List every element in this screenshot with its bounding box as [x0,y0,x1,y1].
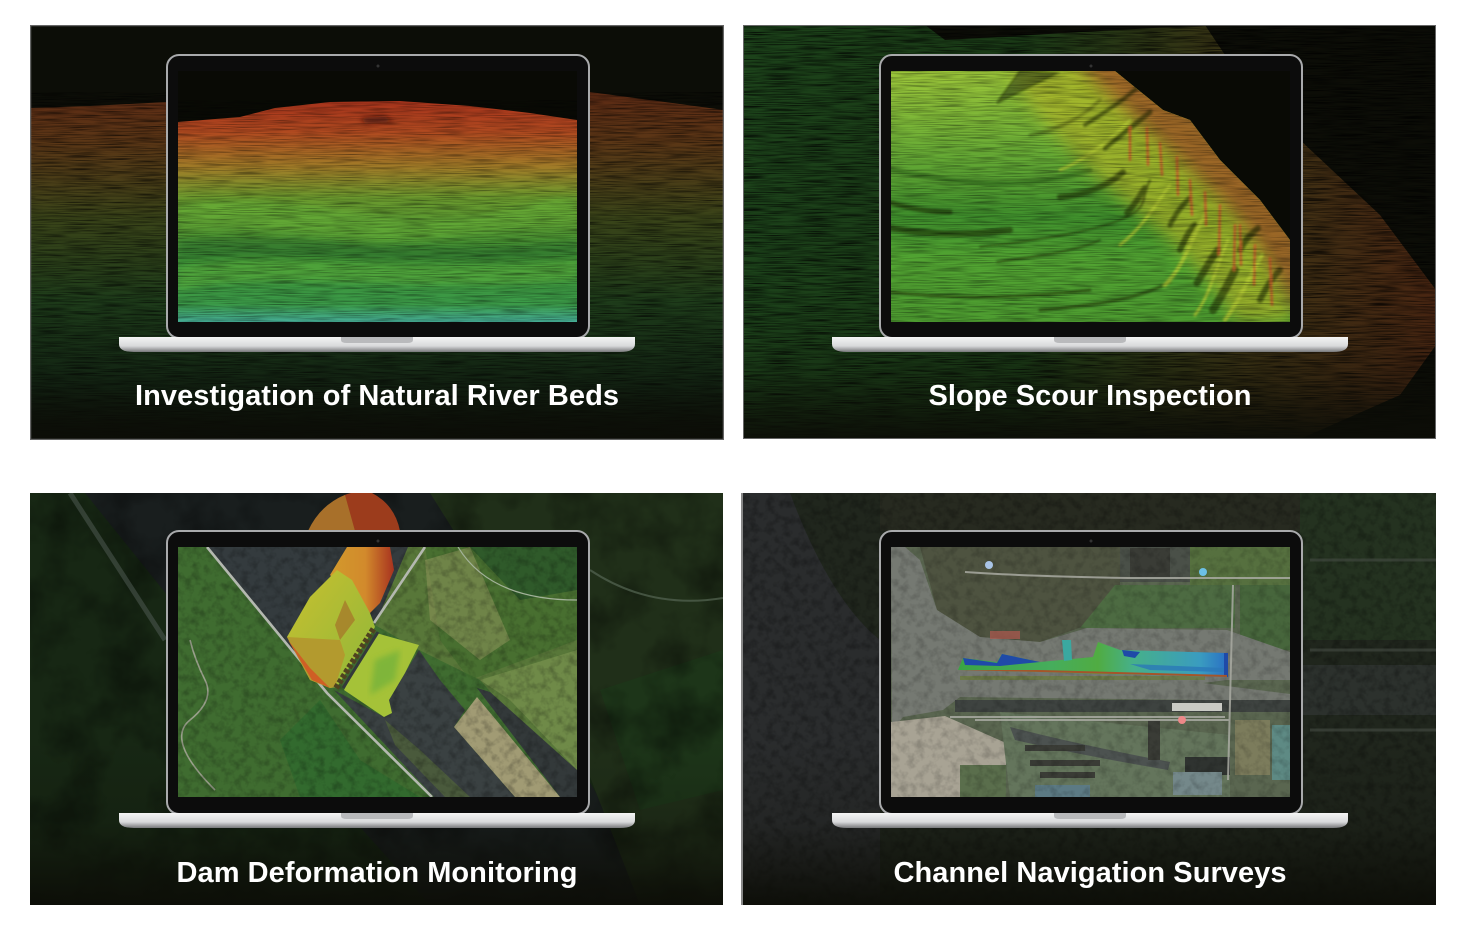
camera [376,64,380,68]
laptop notch [341,337,413,343]
laptop base [832,337,1348,352]
sandbar [454,697,560,797]
laptop notch [1054,813,1126,819]
screen: river bed scan [178,100,577,322]
dark scour streaks [891,71,1280,310]
laptop lid [880,531,1302,814]
screen: dam aerial view [178,547,577,797]
side channel [477,688,577,797]
orange scan spikes [1130,127,1272,305]
caption 3: Dam Deformation Monitoring [176,857,578,889]
laptop 3 [119,531,635,828]
lower river [334,650,515,797]
laptop base [832,813,1348,828]
laptop notch [341,813,413,819]
grass strip [385,720,470,797]
camera [376,540,380,542]
caption 4: Channel Navigation Surveys [894,857,1286,889]
panel 3 background aerial [30,492,723,905]
bright ridge streaks [1060,120,1262,320]
panel 4 background aerial [741,493,1436,905]
laptop notch [1054,337,1126,343]
camera [1090,540,1092,542]
dam scan surface [287,547,419,717]
panel 2 background point cloud [743,25,1436,439]
panel: dam deformation monitoring [30,492,723,905]
panel: natural river beds [30,25,724,440]
panel: channel navigation surveys [741,493,1436,905]
caption 1: Investigation of Natural River Beds [135,380,619,412]
laptop 4 [832,531,1348,828]
screen: slope scan [891,71,1290,322]
laptop 1 [119,55,635,352]
laptop lid [167,55,589,338]
laptop lid [167,531,589,814]
laptop base [119,813,635,828]
laptop 2 [832,40,1348,352]
panel: slope scour inspection [743,25,1436,439]
camera [1090,64,1092,68]
caption 2: Slope Scour Inspection [928,380,1252,412]
panel 1 background point cloud [30,25,724,440]
screen: channel aerial map [891,547,1290,797]
laptop base [119,337,635,352]
channel scan surface [958,640,1228,677]
laptop lid [880,55,1302,338]
